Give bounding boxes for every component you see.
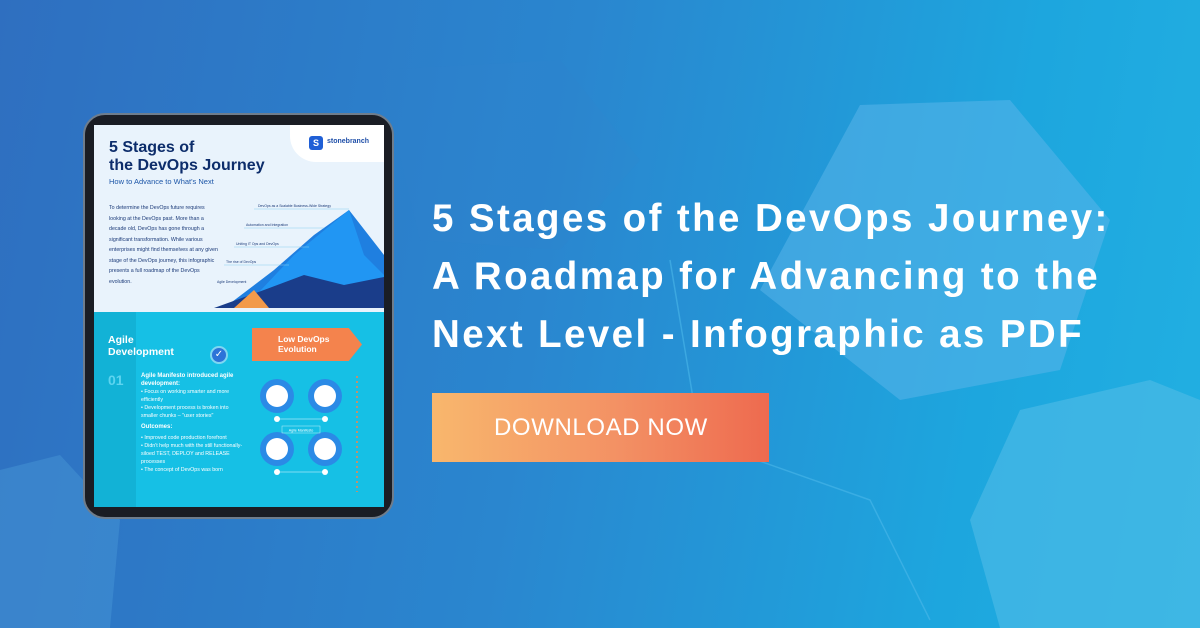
tablet mockup (83, 113, 394, 519)
tablet screen (94, 125, 384, 507)
section text: • Development process is broken into smaller chunks – "user stories" (141, 405, 229, 419)
tablet screen: How to Advance to What's Next (109, 177, 214, 186)
infographic header (109, 139, 265, 174)
section text (141, 372, 242, 473)
orange banner: Evolution (278, 344, 317, 354)
mountain illustration: Automation and Integration (246, 223, 288, 227)
section heading: Development (108, 346, 174, 358)
section text: • Focus on working smarter and more efficiently (141, 389, 229, 403)
mountain illustration: Uniting IT Ops and DevOps (236, 242, 279, 246)
mountain illustration (214, 204, 384, 308)
agile manifesto diagram: Agile Manifesto (289, 428, 313, 432)
mountain illustration: The rise of DevOps (226, 260, 256, 264)
orange banner (252, 328, 362, 361)
agile section: 01 (108, 372, 124, 388)
agile manifesto diagram (260, 376, 358, 492)
infographic header: the DevOps Journey (109, 157, 265, 174)
logo: stonebranch (327, 138, 369, 145)
headline: 5 Stages of the DevOps Journey: (432, 197, 1110, 240)
section heading (108, 334, 174, 358)
orange banner: Low DevOps (278, 334, 329, 344)
agile section (94, 312, 384, 507)
headline: A Roadmap for Advancing to the (432, 255, 1100, 298)
infographic header: 5 Stages of (109, 139, 194, 156)
section text: Agile Manifesto introduced agile development: (141, 373, 233, 387)
download button: DOWNLOAD NOW (494, 414, 708, 441)
section text: • Improved code production forefront (141, 435, 227, 441)
section heading: Agile (108, 334, 134, 346)
mountain illustration: Agile Development (217, 280, 246, 284)
download button (432, 393, 769, 462)
headline (432, 197, 1110, 356)
intro text: To determine the DevOps future requires looking at the DevOps past. More than a decade old, DevOps has gone through a significant transformation. While various enterprises might find themselves at any given stage of the DevOps journey, this infographic presents a full roadmap of the DevOps evolution. (109, 205, 218, 284)
section text: Outcomes: (141, 424, 172, 430)
logo: S (313, 138, 319, 148)
headline: Next Level - Infographic as PDF (432, 313, 1084, 356)
section text: • Didn't help much with the still functionally-siloed TEST, DEPLOY and RELEASE processes (141, 443, 242, 465)
mountain illustration: DevOps as a Scalable Business-Wide Strategy (258, 204, 331, 208)
logo (290, 125, 390, 162)
section text: • The concept of DevOps was born (141, 467, 223, 473)
agile section: ✓ (215, 349, 223, 360)
